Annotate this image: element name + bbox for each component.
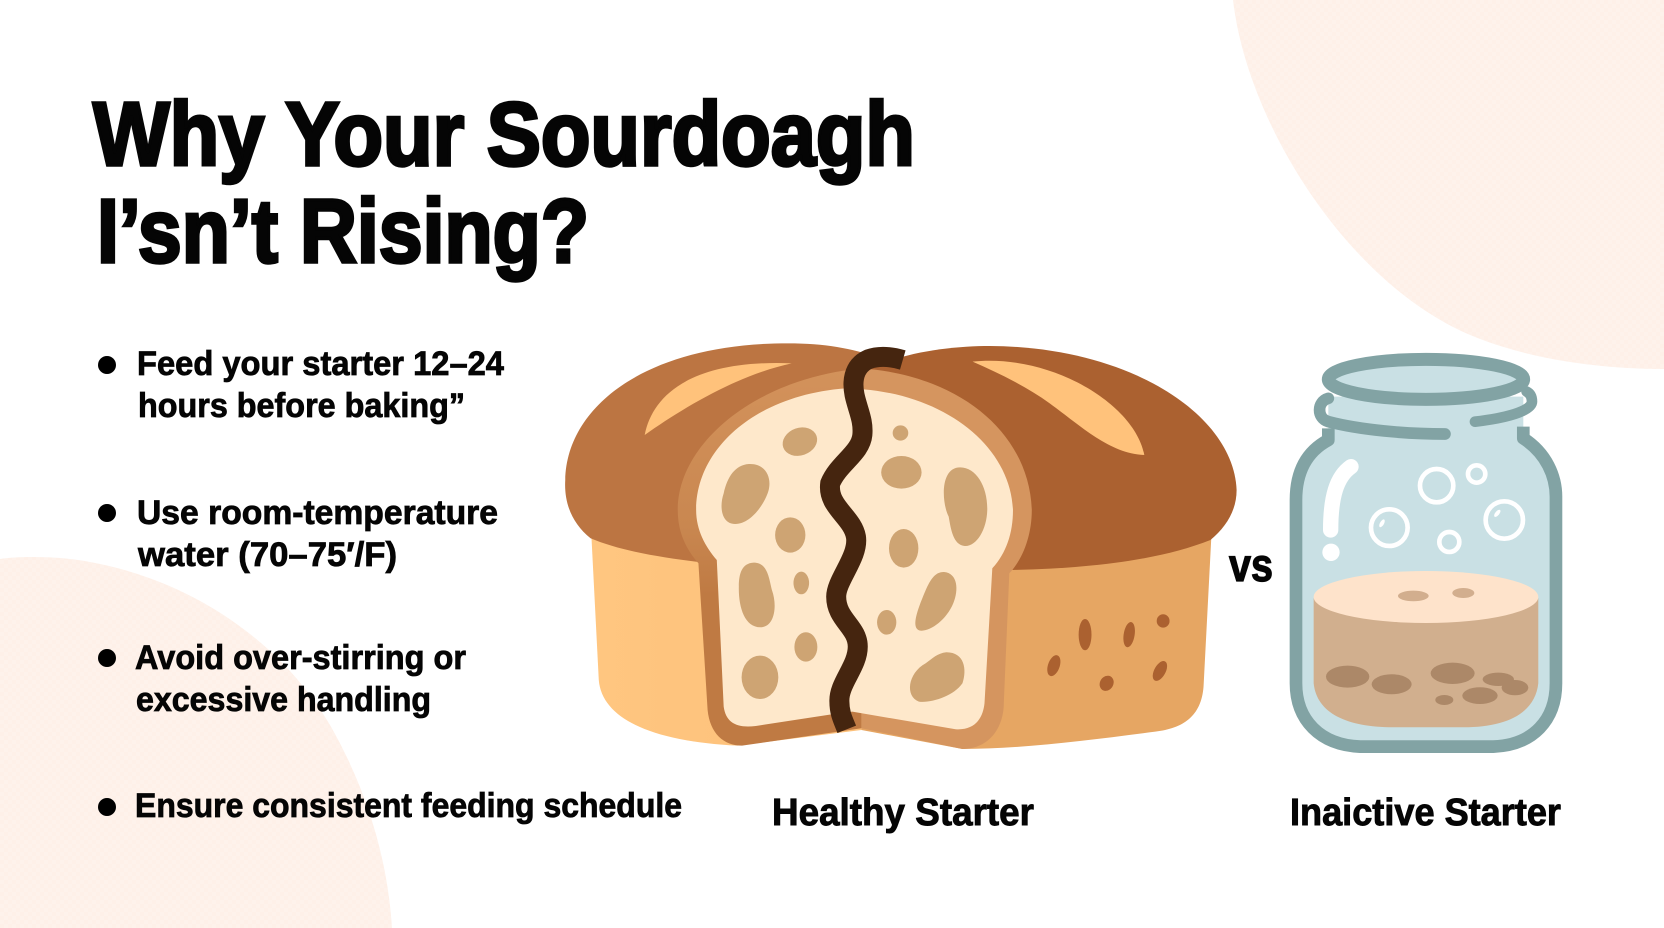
slice crust right: [861, 368, 1032, 749]
loaf left side: [591, 537, 861, 746]
bullet 2: [98, 494, 498, 574]
background blob: bottom left: [0, 557, 392, 928]
starter body: [1314, 598, 1538, 727]
title: I’sn’t Rising?: [97, 182, 589, 282]
right dome: [861, 346, 1237, 570]
icon: jar (inactive starter): [1296, 359, 1556, 747]
bubbles: [1371, 465, 1523, 552]
label: healthy starter: Healthy Starter: [772, 792, 1034, 834]
surface spots: [1398, 588, 1474, 601]
title: [93, 85, 915, 282]
bullet 4: Ensure consistent feeding schedule: [135, 787, 682, 825]
bullet 2: water (70–75′/F): [137, 536, 397, 574]
bullet 1: [98, 345, 504, 425]
neck thread: [1320, 398, 1445, 434]
left dome: [565, 343, 878, 562]
crumb air pockets: [722, 423, 987, 702]
crumb: [696, 388, 1013, 729]
icon: bread loaf (healthy starter): [565, 343, 1237, 749]
loaf right side: [861, 537, 1211, 749]
glass highlight: [1331, 467, 1351, 530]
bullet 3: excessive handling: [136, 681, 431, 719]
sediment: [1326, 663, 1528, 705]
bullet 3: [98, 639, 466, 719]
bullet list: [98, 345, 682, 825]
vs label: vs: [1229, 539, 1273, 591]
crust dots: [1045, 614, 1170, 692]
dome highlights: [645, 363, 792, 435]
bullet 3: Avoid over-stirring or: [135, 639, 466, 677]
background blob: top right: [1233, 0, 1664, 369]
slice crust left: [678, 368, 861, 746]
jar rim: [1328, 359, 1524, 399]
bullet 1: hours before baking”: [138, 387, 465, 425]
bullet 1: Feed your starter 12–24: [137, 345, 504, 383]
bullet 2: Use room-temperature: [137, 494, 498, 532]
title: Why Your Sourdoagh: [93, 85, 915, 185]
starter top: [1314, 571, 1538, 623]
label: inactive starter: Inaictive Starter: [1290, 792, 1561, 834]
crack: [830, 357, 903, 729]
jar body: [1296, 397, 1556, 747]
